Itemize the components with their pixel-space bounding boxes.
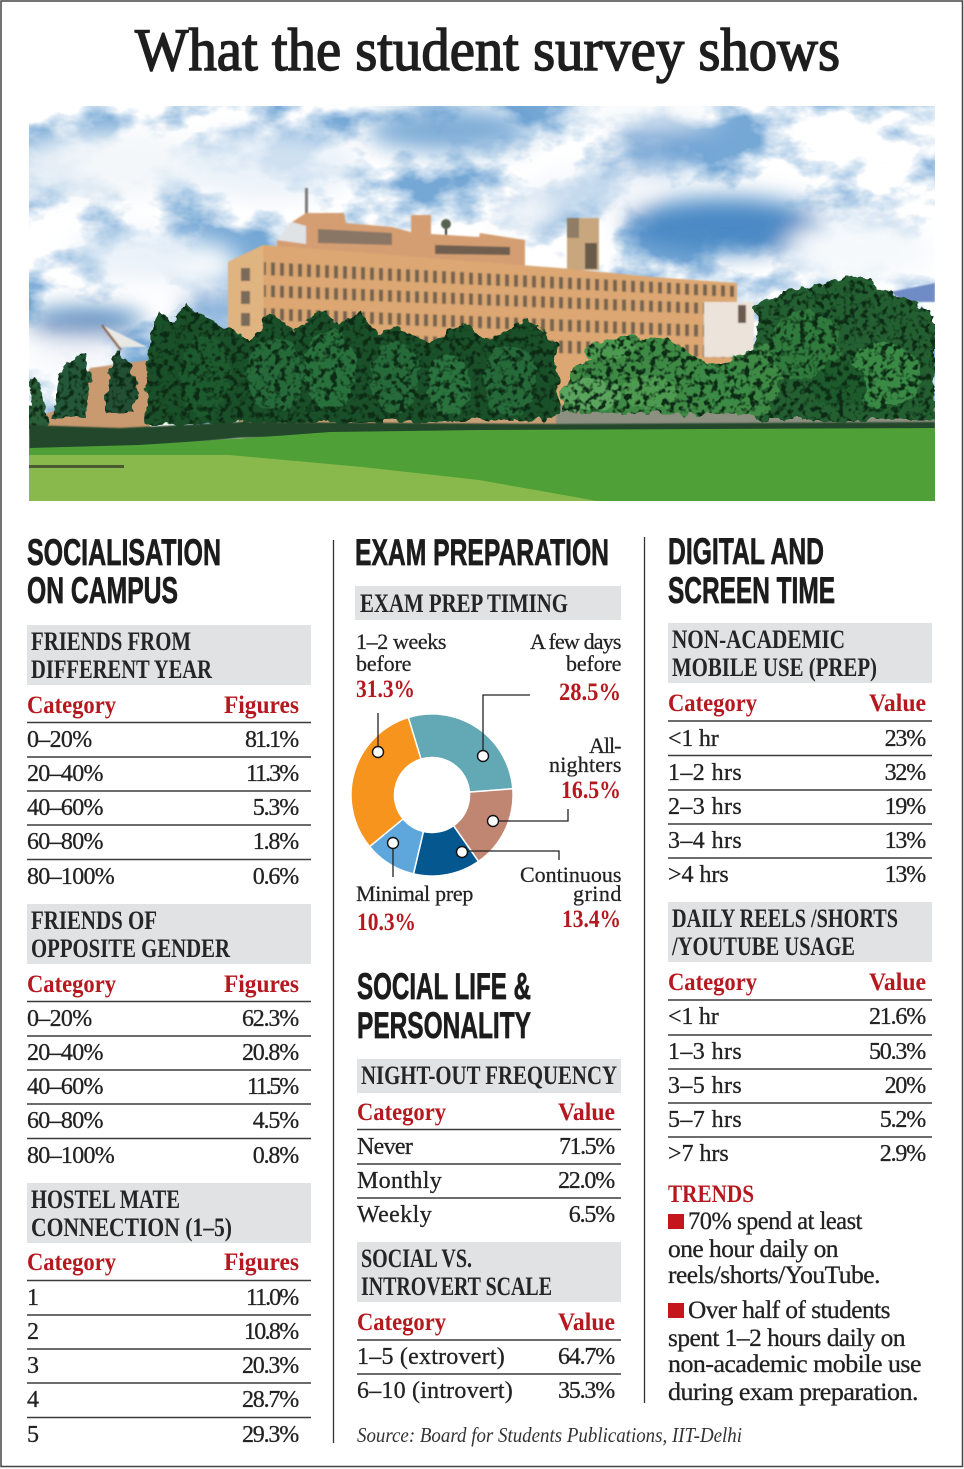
trends callout: TRENDS (668, 1181, 754, 1208)
label: continuous grind (520, 862, 621, 933)
table: daily reels shorts youtube usage: Value (869, 969, 926, 996)
panel: socialisation on campus (27, 532, 311, 1448)
table: night-out frequency: Weekly (357, 1202, 432, 1228)
heading: social life and personality: SOCIAL LIFE & (357, 966, 531, 1007)
table: non-academic mobile use: MOBILE USE (PREP) (672, 653, 877, 682)
table: non-academic mobile use: 13% (885, 828, 926, 854)
table: social vs introvert scale: Value (558, 1309, 615, 1336)
trends callout: during exam preparation. (668, 1379, 918, 1406)
label: 1–2 weeks before (356, 629, 446, 703)
label: all-nighters: All- (589, 733, 621, 758)
label: a few days before: A few days (530, 629, 621, 654)
heading: socialisation on campus: ON CAMPUS (27, 570, 178, 611)
table: friends from different year: 20–40% (27, 761, 104, 787)
panel: exam preparation (351, 532, 621, 936)
trends callout: Over half of students (688, 1297, 890, 1324)
table: friends from different year: 1.8% (253, 829, 299, 855)
label: all-nighters (549, 733, 621, 804)
table: social vs introvert scale: INTROVERT SCALE (361, 1272, 552, 1301)
table: non-academic mobile use: 2–3 hrs (668, 794, 741, 820)
table: night-out frequency: Monthly (357, 1168, 442, 1194)
table: night-out frequency (357, 1059, 621, 1228)
trends callout: reels/shorts/YouTube. (668, 1262, 880, 1289)
table: hostel mate connection: 29.3% (242, 1422, 299, 1448)
table: daily reels shorts youtube usage: 21.6% (869, 1004, 926, 1030)
trends callout (668, 1181, 921, 1406)
trees (146, 303, 558, 425)
table: non-academic mobile use: NON-ACADEMIC (672, 625, 845, 654)
trends callout: one hour daily on (668, 1236, 839, 1263)
panel: social life and personality (357, 966, 742, 1447)
table: non-academic mobile use: 32% (885, 760, 926, 786)
table: non-academic mobile use: <1 hr (668, 726, 719, 752)
table: friends from different year (27, 625, 311, 890)
table: hostel mate connection: 28.7% (242, 1387, 299, 1413)
table: hostel mate connection: CONNECTION (1–5) (31, 1213, 232, 1242)
table: daily reels shorts youtube usage: 20% (885, 1073, 926, 1099)
label: minimal prep (356, 881, 473, 936)
table: daily reels shorts youtube usage: 1–3 hrs (668, 1039, 741, 1065)
table: friends of opposite gender: OPPOSITE GENDER (31, 934, 230, 963)
hedge band (29, 422, 935, 452)
table: friends from different year: 60–80% (27, 829, 104, 855)
table: daily reels shorts youtube usage: 50.3% (869, 1039, 926, 1065)
label: all-nighters: 16.5% (561, 777, 621, 804)
table: non-academic mobile use: Value (869, 690, 926, 717)
table: night-out frequency: 6.5% (569, 1202, 615, 1228)
table: friends of opposite gender: Category (27, 971, 116, 998)
table: friends from different year: Figures (224, 692, 299, 719)
table: non-academic mobile use: 1–2 hrs (668, 760, 741, 786)
table: friends from different year: 81.1% (245, 727, 299, 753)
label: continuous grind: 13.4% (562, 906, 621, 933)
heading: digital and screen time: DIGITAL AND (668, 531, 824, 572)
table: non-academic mobile use (668, 623, 932, 888)
leader lines and markers (372, 695, 568, 877)
label: 1–2 weeks before: 31.3% (356, 676, 415, 703)
table: daily reels shorts youtube usage (668, 902, 932, 1167)
label: a few days before: before (566, 651, 621, 676)
heading: exam preparation: EXAM PREPARATION (355, 532, 609, 573)
table: night-out frequency: Category (357, 1099, 446, 1126)
label: continuous grind: Continuous (520, 862, 621, 887)
table: social vs introvert scale: 1–5 (extrovert) (357, 1344, 504, 1370)
trends callout: spent 1–2 hours daily on (668, 1325, 906, 1352)
table: hostel mate connection: HOSTEL MATE (31, 1185, 180, 1214)
table: social vs introvert scale: SOCIAL VS. (361, 1244, 472, 1273)
table: daily reels shorts youtube usage: >7 hrs (668, 1141, 728, 1167)
table: hostel mate connection: 3 (27, 1353, 39, 1379)
label: continuous grind: grind (573, 881, 621, 906)
table: night-out frequency: 71.5% (559, 1134, 615, 1160)
trends callout: non-academic mobile use (668, 1351, 921, 1378)
heading: digital and screen time: SCREEN TIME (668, 570, 835, 611)
source note: Source: Board for Students Publications, IIT-Delhi (357, 1423, 742, 1447)
table: daily reels shorts youtube usage: 5.2% (880, 1107, 926, 1133)
label: all-nighters: nighters (549, 752, 621, 777)
table: friends of opposite gender (27, 904, 311, 1169)
table: friends from different year: Category (27, 692, 116, 719)
heading: socialisation on campus (27, 532, 221, 611)
table: hostel mate connection (27, 1183, 311, 1448)
table: non-academic mobile use: 23% (885, 726, 926, 752)
label: 1–2 weeks before: before (356, 651, 411, 676)
panel: digital and screen time (668, 531, 932, 1406)
table: friends of opposite gender: 0–20% (27, 1006, 92, 1032)
subheading: exam prep timing: EXAM PREP TIMING (360, 589, 568, 618)
table: friends from different year: 0.6% (253, 864, 299, 890)
table: friends of opposite gender: 20–40% (27, 1040, 104, 1066)
table: daily reels shorts youtube usage: /YOUTUBE USAGE (671, 932, 855, 961)
heading: social life and personality (357, 966, 531, 1046)
table: friends of opposite gender: 11.5% (247, 1074, 299, 1100)
table: friends from different year: 0–20% (27, 727, 92, 753)
table: daily reels shorts youtube usage: Category (668, 969, 757, 996)
label: 1–2 weeks before: 1–2 weeks (356, 629, 446, 654)
table: social vs introvert scale (357, 1242, 621, 1404)
table: friends of opposite gender: 20.8% (242, 1040, 299, 1066)
table: hostel mate connection: Figures (224, 1249, 299, 1276)
table: non-academic mobile use: 19% (885, 794, 926, 820)
table: friends of opposite gender: 40–60% (27, 1074, 104, 1100)
table: friends from different year: 40–60% (27, 795, 104, 821)
table: daily reels shorts youtube usage: DAILY REELS /SHORTS (672, 904, 898, 933)
table: hostel mate connection: 11.0% (246, 1285, 299, 1311)
table: friends from different year: 11.3% (246, 761, 299, 787)
table: non-academic mobile use: 13% (885, 862, 926, 888)
table: daily reels shorts youtube usage: 5–7 hrs (668, 1107, 741, 1133)
title: What the student survey shows (135, 17, 840, 83)
table: non-academic mobile use: >4 hrs (668, 862, 728, 888)
table: night-out frequency: Value (558, 1099, 615, 1126)
label: minimal prep: Minimal prep (356, 881, 473, 906)
label: a few days before: 28.5% (559, 679, 621, 706)
table: hostel mate connection: Category (27, 1249, 116, 1276)
heading: socialisation on campus: SOCIALISATION (27, 532, 221, 573)
table: night-out frequency: Never (357, 1134, 413, 1160)
table: hostel mate connection: 4 (27, 1387, 39, 1413)
trends callout: 70% spend at least (688, 1208, 863, 1235)
table: social vs introvert scale: 64.7% (558, 1344, 615, 1370)
table: non-academic mobile use: Category (668, 690, 757, 717)
table: friends of opposite gender: 80–100% (27, 1143, 115, 1169)
table: hostel mate connection: 2 (27, 1319, 38, 1345)
table: hostel mate connection: 5 (27, 1422, 39, 1448)
table: friends from different year: DIFFERENT YEAR (31, 655, 212, 684)
table: friends of opposite gender: 4.5% (253, 1108, 299, 1134)
donut chart (351, 714, 513, 876)
table: friends of opposite gender: 0.8% (253, 1143, 299, 1169)
table: daily reels shorts youtube usage: <1 hr (668, 1004, 719, 1030)
table: non-academic mobile use: 3–4 hrs (668, 828, 741, 854)
table: friends from different year: 5.3% (253, 795, 299, 821)
table: friends of opposite gender: 60–80% (27, 1108, 104, 1134)
table: social vs introvert scale: 35.3% (558, 1378, 615, 1404)
heading: social life and personality: PERSONALITY (357, 1005, 531, 1046)
table: friends of opposite gender: Figures (224, 971, 299, 998)
table: daily reels shorts youtube usage: 2.9% (880, 1141, 926, 1167)
table: social vs introvert scale: Category (357, 1309, 446, 1336)
table: hostel mate connection: 20.3% (242, 1353, 299, 1379)
table: friends from different year: FRIENDS FROM (31, 627, 191, 656)
table: night-out frequency: 22.0% (558, 1168, 615, 1194)
label: minimal prep: 10.3% (357, 909, 416, 936)
table: friends of opposite gender: 62.3% (242, 1006, 299, 1032)
lawn (29, 428, 935, 501)
photo: IIT Delhi campus building, trees and lawn (10, 101, 936, 501)
table: social vs introvert scale: 6–10 (introvert) (357, 1378, 512, 1404)
label: a few days before (530, 629, 621, 706)
table: night-out frequency: NIGHT-OUT FREQUENCY (361, 1061, 617, 1090)
table: friends of opposite gender: FRIENDS OF (31, 906, 157, 935)
heading: digital and screen time (668, 531, 835, 611)
table: hostel mate connection: 1 (27, 1285, 38, 1311)
table: friends from different year: 80–100% (27, 864, 115, 890)
table: hostel mate connection: 10.8% (244, 1319, 299, 1345)
building (305, 188, 308, 216)
table: daily reels shorts youtube usage: 3–5 hrs (668, 1073, 741, 1099)
